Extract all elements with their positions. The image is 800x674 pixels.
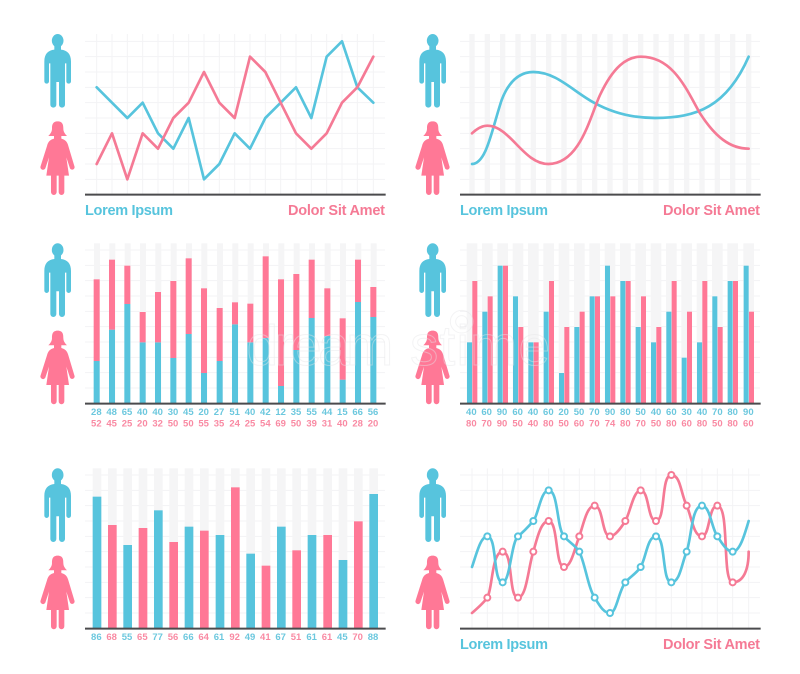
numbers: bar values: 77 [152,632,163,643]
numbers: blue values: 20 [198,407,209,418]
numbers: blue values [466,407,754,418]
numbers: pink values: 60 [574,418,584,429]
numbers: blue values: 50 [635,407,646,418]
numbers: bar values: 65 [137,632,148,643]
numbers: pink values: 80 [666,418,677,429]
numbers: pink values: 40 [337,418,348,429]
x axis [460,401,761,407]
bars: blue segments [94,302,376,404]
numbers: pink values: 60 [681,418,692,429]
numbers: pink values: 31 [322,418,333,429]
numbers: pink values: 69 [275,418,286,429]
icon: male figure [44,468,71,542]
numbers: blue values: 51 [229,407,241,418]
bars: blue series [467,266,749,404]
numbers: bar values: 64 [198,632,210,643]
panel: stacked bar chart [40,243,386,429]
numbers: bar values: 61 [306,632,318,643]
numbers: pink values: 50 [558,418,569,429]
numbers: pink values: 80 [727,418,738,429]
icon: female figure [415,121,450,195]
panel: grouped bar chart [415,243,761,429]
icon: male figure [419,34,446,108]
numbers: blue values: 30 [168,407,178,418]
x axis [85,401,386,407]
label: Dolor Sit Amet: Dolor Sit Amet [663,637,760,653]
numbers: blue values: 12 [275,407,286,418]
label: Dolor Sit Amet: Dolor Sit Amet [288,203,385,219]
numbers: pink values: 54 [260,418,271,429]
numbers: pink values: 20 [137,418,148,429]
numbers: pink values: 50 [183,418,194,429]
line: pink series [97,57,373,179]
icon: female figure [415,556,450,629]
numbers: pink values: 50 [291,418,301,429]
numbers: pink values: 45 [106,418,118,429]
curve: blue series [472,57,749,164]
numbers: blue values: 40 [528,407,538,418]
curve: pink series [472,475,749,613]
label: Dolor Sit Amet: Dolor Sit Amet [663,203,760,219]
numbers: blue values: 48 [106,407,117,418]
numbers: bar values: 86 [91,632,102,643]
numbers: bar values: 41 [260,632,271,643]
numbers: pink values: 24 [229,418,241,429]
numbers: bar values: 45 [337,632,348,643]
bars: blue series [93,494,378,629]
numbers: blue values: 80 [620,407,631,418]
numbers: bar values: 49 [245,632,255,643]
chart: grid background [460,468,760,629]
numbers: pink values: 80 [697,418,707,429]
chart: background bands and grid [85,468,385,629]
numbers: blue values: 56 [368,407,378,418]
chart: grid background [85,34,385,195]
numbers: pink values: 50 [168,418,178,429]
numbers: blue values: 60 [666,407,677,418]
label: Lorem Ipsum: Lorem Ipsum [460,637,548,653]
numbers: bar values: 67 [275,632,286,643]
markers: blue series [484,487,736,616]
label: Lorem Ipsum: Lorem Ipsum [460,203,548,219]
numbers: bar values: 92 [229,632,240,643]
icon: female figure [40,331,75,404]
numbers: blue values: 44 [322,407,333,418]
numbers: blue values: 40 [137,407,148,418]
numbers: pink values: 28 [352,418,363,429]
numbers: pink values: 74 [605,418,616,429]
numbers: pink values: 80 [466,418,477,429]
watermark: dream [247,315,393,378]
numbers: pink values: 70 [635,418,646,429]
numbers: bar values: 61 [214,632,225,643]
chart: grid lines [460,41,760,179]
numbers: pink values: 80 [543,418,554,429]
numbers: pink values [91,418,378,429]
numbers: blue values: 66 [352,407,363,418]
panel: smooth curve chart [415,34,761,219]
x axis [85,192,386,198]
numbers: pink values: 80 [620,418,631,429]
numbers: blue values: 40 [651,407,661,418]
numbers: bar values: 66 [183,632,194,643]
icon: female figure [40,121,75,195]
icon: male figure [419,243,446,317]
numbers: pink values: 55 [198,418,210,429]
numbers: blue values: 70 [712,407,723,418]
numbers: blue values: 40 [466,407,477,418]
numbers: blue values: 50 [574,407,584,418]
numbers: blue values: 42 [260,407,271,418]
numbers: pink values: 52 [91,418,102,429]
chart: striped background [469,34,751,195]
numbers: pink values: 50 [651,418,661,429]
numbers: blue values: 55 [306,407,318,418]
numbers: blue values: 30 [681,407,692,418]
markers: pink series [484,472,736,601]
numbers: bar values: 51 [291,632,302,643]
numbers: blue values: 60 [543,407,554,418]
numbers: blue values: 20 [558,407,569,418]
bars: pink series [108,487,363,629]
numbers: bar values: 68 [106,632,117,643]
numbers: blue values: 28 [91,407,102,418]
numbers: bar values [91,632,378,643]
numbers: blue values: 70 [589,407,600,418]
numbers: pink values: 70 [589,418,600,429]
numbers: bar values: 88 [368,632,378,643]
numbers: blue values: 40 [697,407,707,418]
numbers: blue values: 90 [605,407,615,418]
bars: pink series [472,266,754,404]
numbers: pink values: 25 [122,418,133,429]
numbers: blue values: 60 [512,407,523,418]
icon: male figure [419,468,446,542]
numbers: pink values: 40 [528,418,538,429]
numbers: pink values: 70 [481,418,492,429]
numbers: bar values: 55 [122,632,133,643]
numbers: blue values: 45 [183,407,194,418]
numbers: pink values [466,418,754,429]
curve: blue series [472,490,749,613]
chart: background bands and grid [85,243,385,404]
x axis [460,626,761,632]
label: Lorem Ipsum: Lorem Ipsum [85,203,173,219]
numbers: pink values: 60 [743,418,754,429]
watermark: stime [410,315,550,378]
numbers: blue values: 90 [743,407,754,418]
numbers: blue values: 90 [497,407,507,418]
numbers: pink values: 25 [245,418,256,429]
numbers: blue values: 40 [245,407,255,418]
numbers: blue values: 60 [481,407,492,418]
bars: pink segments [94,256,376,386]
numbers: blue values: 27 [214,407,224,418]
panel: spline chart with markers [415,468,761,653]
chart: background bands and grid [460,243,760,404]
numbers: blue values: 15 [337,407,348,418]
x axis [460,192,761,198]
curve: pink series [472,57,749,164]
numbers: blue values: 80 [727,407,738,418]
panel: single value bar chart [40,468,386,643]
icon: male figure [44,243,71,317]
numbers: pink values: 35 [214,418,225,429]
icon: female figure [415,331,450,404]
numbers: bar values: 56 [168,632,178,643]
icon: male figure [44,34,71,108]
numbers: pink values: 20 [368,418,378,429]
line: blue series [97,41,373,179]
numbers: blue values: 35 [291,407,302,418]
numbers: blue values [91,407,378,418]
numbers: pink values: 50 [712,418,723,429]
watermark [247,310,550,378]
numbers: pink values: 90 [497,418,507,429]
numbers: blue values: 65 [122,407,133,418]
numbers: blue values: 40 [152,407,163,418]
numbers: pink values: 50 [512,418,523,429]
icon: female figure [40,556,75,629]
numbers: bar values: 61 [322,632,333,643]
numbers: pink values: 39 [306,418,317,429]
numbers: bar values: 70 [352,632,363,643]
panel: zigzag line chart [40,34,386,219]
numbers: pink values: 32 [152,418,163,429]
x axis [85,626,386,632]
